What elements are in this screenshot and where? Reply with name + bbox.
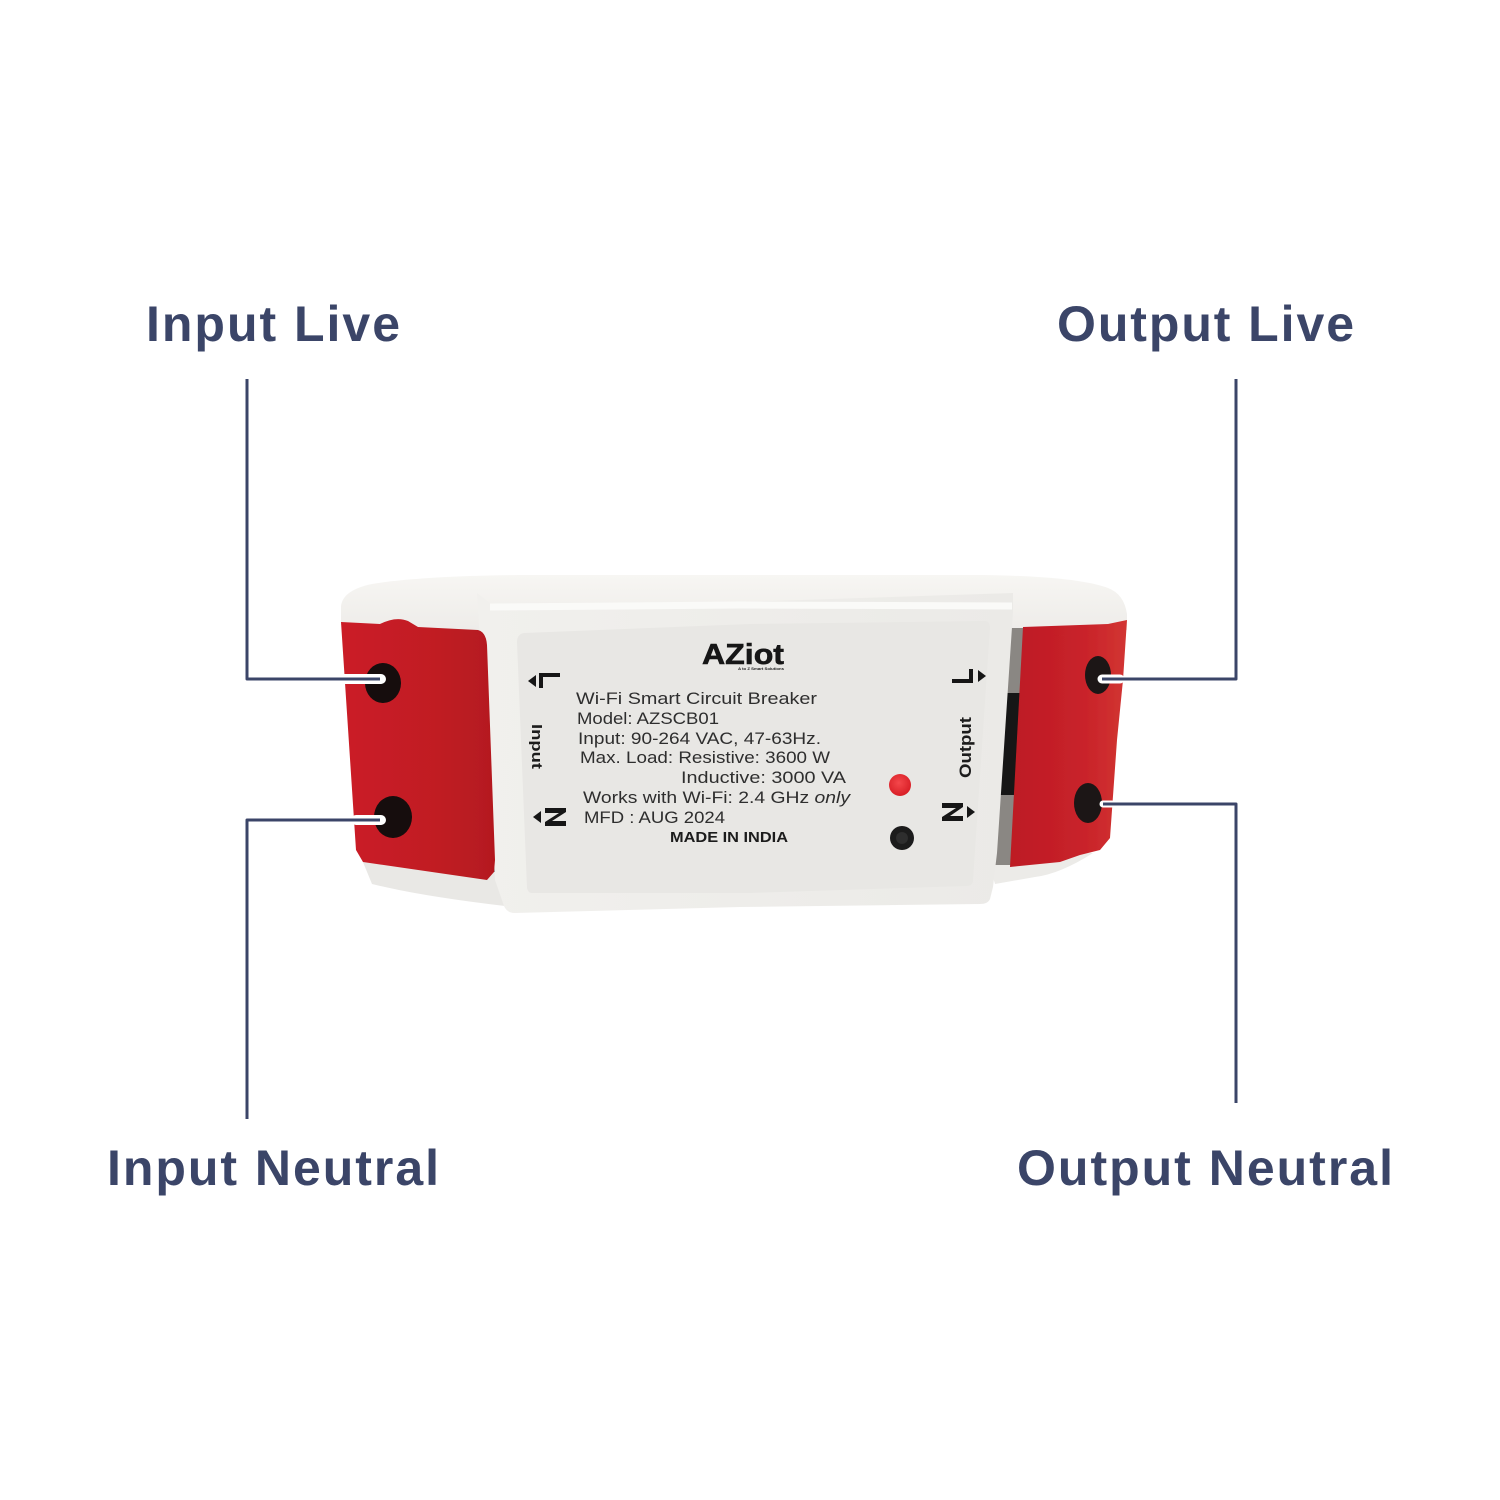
marking: Output: Output [956, 717, 975, 778]
device rear housing top [341, 575, 1127, 640]
callout line: Input Live [247, 379, 381, 679]
heading: Input Neutral: Input Neutral [107, 1140, 439, 1196]
specification text block: Wi-Fi Smart Circuit Breaker [576, 689, 817, 708]
specification text block: Inductive: 3000 VA [681, 768, 847, 787]
logo: AZiot: AZiot [702, 639, 784, 671]
heading: Output Live: Output Live [1057, 296, 1354, 352]
input neutral screw hole [374, 796, 412, 838]
specification text block: MADE IN INDIA [670, 829, 788, 846]
callout line: Output Neutral [1103, 804, 1236, 1103]
specification text block: MFD : AUG 2024 [584, 808, 725, 827]
input live screw hole [365, 663, 401, 703]
marking: Input: Input [528, 724, 545, 769]
front white plate [477, 593, 1013, 913]
gap beside output terminal [992, 628, 1030, 865]
marking: N output arrow [942, 803, 975, 821]
heading: Output Neutral: Output Neutral [1017, 1140, 1393, 1196]
left cap underside [358, 850, 505, 906]
right red terminal cover [1010, 620, 1127, 867]
left red terminal cover [341, 619, 495, 880]
marking: L input arrow [528, 673, 560, 688]
specification text block: Max. Load: Resistive: 3600 W [580, 748, 830, 767]
device: smart circuit breaker [341, 575, 1127, 913]
specification text block: Works with Wi-Fi: 2.4 GHz only [583, 788, 852, 807]
heading: Input Live: Input Live [146, 296, 400, 352]
right cap underside [985, 850, 1093, 884]
callout line: Input Neutral [247, 820, 381, 1119]
gap beside input terminal [484, 640, 498, 872]
callout line: Output Live [1102, 379, 1236, 679]
output neutral screw hole [1074, 783, 1102, 823]
specification text block: Model: AZSCB01 [577, 709, 719, 728]
black push button [890, 826, 914, 850]
marking: L output arrow [952, 669, 986, 683]
specification text block: Input: 90-264 VAC, 47-63Hz. [578, 729, 821, 748]
marking: N input arrow [533, 808, 566, 826]
specification text block [576, 689, 852, 846]
red status LED [889, 774, 911, 796]
label panel [517, 621, 990, 893]
logo: AZiot: A to Z Smart Solutions [738, 666, 785, 671]
output live screw hole [1085, 656, 1111, 694]
